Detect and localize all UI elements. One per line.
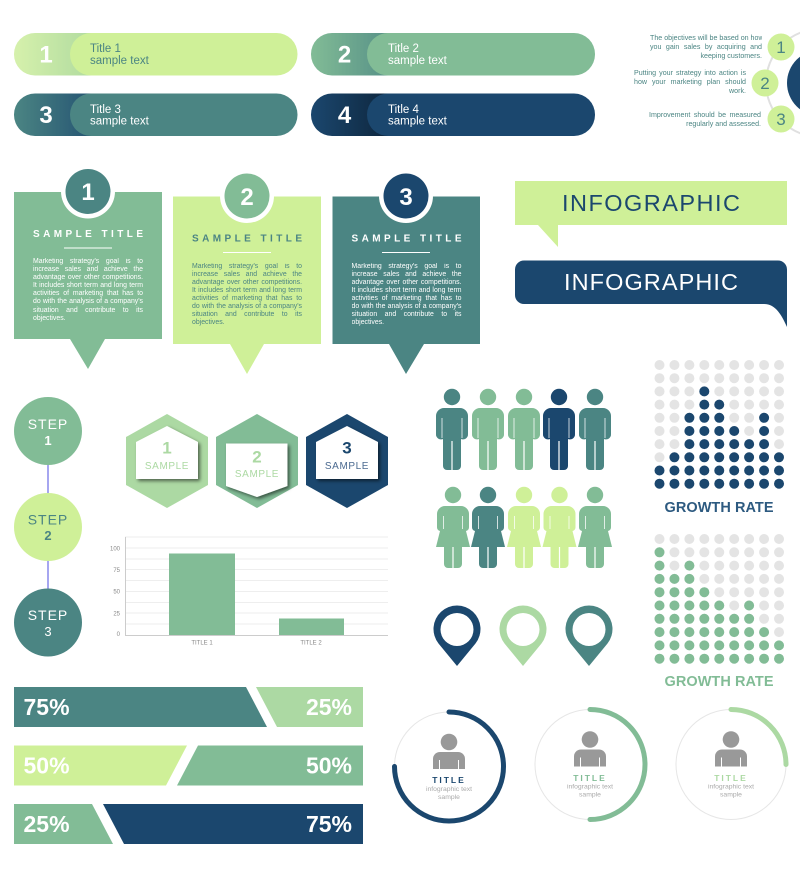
- card: sample title 2: activities of marketing that has to: [192, 295, 302, 302]
- split bar: 75 / 25: [14, 687, 363, 727]
- progress ring: navy 75 percent: sample: [438, 794, 460, 801]
- bar: title 1: [169, 554, 235, 635]
- bar chart: 50: [113, 590, 121, 596]
- progress ring: light green 25 percent: TITLE: [714, 773, 748, 783]
- card: sample title 1: activities of marketing that has to: [33, 290, 143, 297]
- card: sample title 3: It includes short term and long term: [352, 287, 462, 294]
- hexagon badge 1: SAMPLE: [145, 461, 189, 472]
- panel: numbered objectives: Putting your strategy into action is: [634, 69, 746, 77]
- male pictogram row: [436, 389, 611, 470]
- card: sample title 1: increase sales and achieve the: [33, 266, 143, 273]
- card: sample title 1: do with the analysis of a company's: [33, 298, 143, 305]
- card: sample title 3: increase sales and achieve the: [352, 271, 462, 278]
- card: sample title 3: objectives.: [352, 319, 384, 326]
- panel: numbered objectives: [634, 29, 800, 137]
- pill: title 1: [14, 33, 298, 76]
- card: sample title 1: [14, 164, 162, 369]
- card: sample title 2: SAMPLE TITLE: [192, 234, 302, 244]
- hexagon badge 3: 3: [342, 438, 352, 458]
- split bar: 25 / 75: [14, 804, 363, 844]
- split bar: 50 / 50: 50%: [306, 752, 352, 778]
- pill: title 3: sample text: [90, 116, 150, 128]
- hexagon badge 2: SAMPLE: [235, 469, 279, 480]
- card: sample title 2: do with the analysis of a company's: [192, 303, 302, 310]
- panel: numbered objectives: Improvement should be measured: [649, 111, 761, 119]
- hexagon badge 2: 2: [252, 448, 262, 466]
- banner: infographic lime: [515, 181, 787, 247]
- card: sample title 1: advantage over other competitions.: [33, 274, 143, 281]
- card: sample title 1: SAMPLE TITLE: [33, 229, 143, 240]
- card: sample title 3: 3: [399, 184, 413, 211]
- banner: infographic lime: INFOGRAPHIC: [562, 190, 740, 216]
- card: sample title 2: 2: [240, 184, 254, 211]
- pill: title 3: [14, 94, 298, 136]
- progress ring: light green 25 percent: [676, 710, 786, 820]
- split bar: 75 / 25: 75%: [24, 694, 70, 720]
- hexagon badge 3: [306, 414, 388, 508]
- panel: numbered objectives: 2: [760, 74, 770, 93]
- pill: title 4: Title 4: [388, 104, 419, 116]
- card: sample title 3: activities of marketing that has to: [352, 295, 462, 302]
- female pictogram row: [436, 487, 612, 568]
- pill: title 4: sample text: [388, 116, 448, 128]
- pill: title 4: 4: [338, 102, 352, 129]
- progress ring: green 50 percent: TITLE: [573, 773, 607, 783]
- dot chart: growth rate green: GROWTH RATE: [664, 674, 774, 690]
- bar chart: [110, 537, 388, 646]
- pill: title 2: sample text: [388, 55, 448, 67]
- progress ring: green 50 percent: sample: [579, 792, 601, 798]
- panel: numbered objectives: 1: [776, 38, 786, 57]
- pill: title 2: 2: [338, 42, 351, 68]
- progress ring: light green 25 percent: infographic text: [708, 784, 754, 790]
- bar: title 2: [279, 618, 344, 635]
- card: sample title 2: [173, 169, 321, 374]
- card: sample title 3: do with the analysis of a company's: [352, 303, 462, 310]
- card: sample title 3: SAMPLE TITLE: [352, 234, 462, 244]
- dot chart: growth rate navy: [660, 365, 780, 516]
- pill: title 2: [311, 33, 595, 76]
- pill: title 1: Title 1: [90, 43, 121, 55]
- panel: numbered objectives: keeping customers.: [700, 52, 762, 60]
- bar chart: TITLE 1: [191, 640, 213, 646]
- bar chart: 100: [110, 546, 121, 552]
- step timeline: 1: [44, 433, 52, 448]
- pill: title 3: Title 3: [90, 104, 121, 116]
- card: sample title 1: 1: [81, 179, 95, 206]
- banner: infographic navy: [515, 260, 787, 327]
- split bar: 50 / 50: 50%: [24, 752, 70, 778]
- card: sample title 1: situation and contribute to its: [33, 307, 143, 314]
- step timeline: 3: [44, 624, 52, 639]
- progress ring: navy 75 percent: [394, 712, 504, 821]
- panel: numbered objectives: 3: [776, 110, 786, 129]
- card: sample title 2: Marketing strategy's goal is to: [192, 262, 302, 270]
- bar chart: 0: [117, 632, 121, 638]
- dot chart: growth rate navy: GROWTH RATE: [664, 500, 774, 516]
- split bar: 25 / 75: 25%: [24, 811, 70, 837]
- panel: numbered objectives: you gain sales by acquiring and: [650, 43, 762, 51]
- progress ring: green 50 percent: [535, 710, 645, 820]
- panel: numbered objectives: regularly and assessed.: [686, 120, 761, 128]
- hexagon badge 3: SAMPLE: [325, 461, 369, 472]
- card: sample title 2: It includes short term and long term: [192, 287, 302, 294]
- card: sample title 1: Marketing strategy's goal is to: [33, 258, 143, 265]
- step timeline: STEP: [28, 416, 68, 432]
- progress ring: green 50 percent: infographic text: [567, 784, 613, 790]
- card: sample title 2: advantage over other competitions.: [192, 279, 302, 286]
- panel: numbered objectives: how your marketing plan should: [634, 78, 746, 86]
- dot chart: growth rate green: [660, 539, 780, 690]
- card: sample title 2: situation and contribute to its: [192, 311, 302, 318]
- bar chart: TITLE 2: [300, 640, 322, 646]
- progress ring: navy 75 percent: infographic text: [426, 786, 472, 793]
- split bar: 75 / 25: 25%: [306, 694, 352, 720]
- pill: title 4: [311, 94, 595, 136]
- card: sample title 2: objectives.: [192, 319, 225, 326]
- pill: title 1: sample text: [90, 55, 150, 67]
- card: sample title 1: objectives.: [33, 315, 66, 322]
- card: sample title 1: It includes short term and long term: [33, 282, 143, 289]
- split bar: 50 / 50: [14, 746, 363, 786]
- bar chart: 25: [113, 612, 121, 618]
- step timeline: STEP: [28, 607, 68, 623]
- hexagon badge 1: 1: [162, 438, 172, 458]
- hexagon badge 1: [126, 414, 208, 508]
- split bar: 25 / 75: 75%: [306, 811, 352, 837]
- card: sample title 3: [332, 169, 480, 374]
- map pins: [434, 606, 612, 666]
- card: sample title 3: advantage over other competitions.: [352, 279, 462, 286]
- panel: numbered objectives: The objectives will be based on how: [650, 34, 762, 42]
- card: sample title 2: increase sales and achieve the: [192, 271, 302, 278]
- hexagon badge 2: [216, 414, 298, 508]
- panel: numbered objectives: work.: [729, 87, 746, 95]
- banner: infographic navy: INFOGRAPHIC: [564, 269, 738, 295]
- progress ring: light green 25 percent: sample: [720, 792, 742, 798]
- card: sample title 3: Marketing strategy's goal is to: [352, 262, 462, 270]
- step timeline: [14, 397, 82, 656]
- progress ring: navy 75 percent: TITLE: [432, 775, 466, 785]
- pill: title 3: 3: [39, 102, 53, 129]
- step timeline: 2: [44, 528, 52, 543]
- pill: title 1: 1: [39, 42, 53, 68]
- bar chart: 75: [113, 568, 121, 574]
- card: sample title 3: situation and contribute to its: [352, 311, 462, 318]
- pill: title 2: Title 2: [388, 43, 419, 55]
- step timeline: STEP: [28, 512, 68, 528]
